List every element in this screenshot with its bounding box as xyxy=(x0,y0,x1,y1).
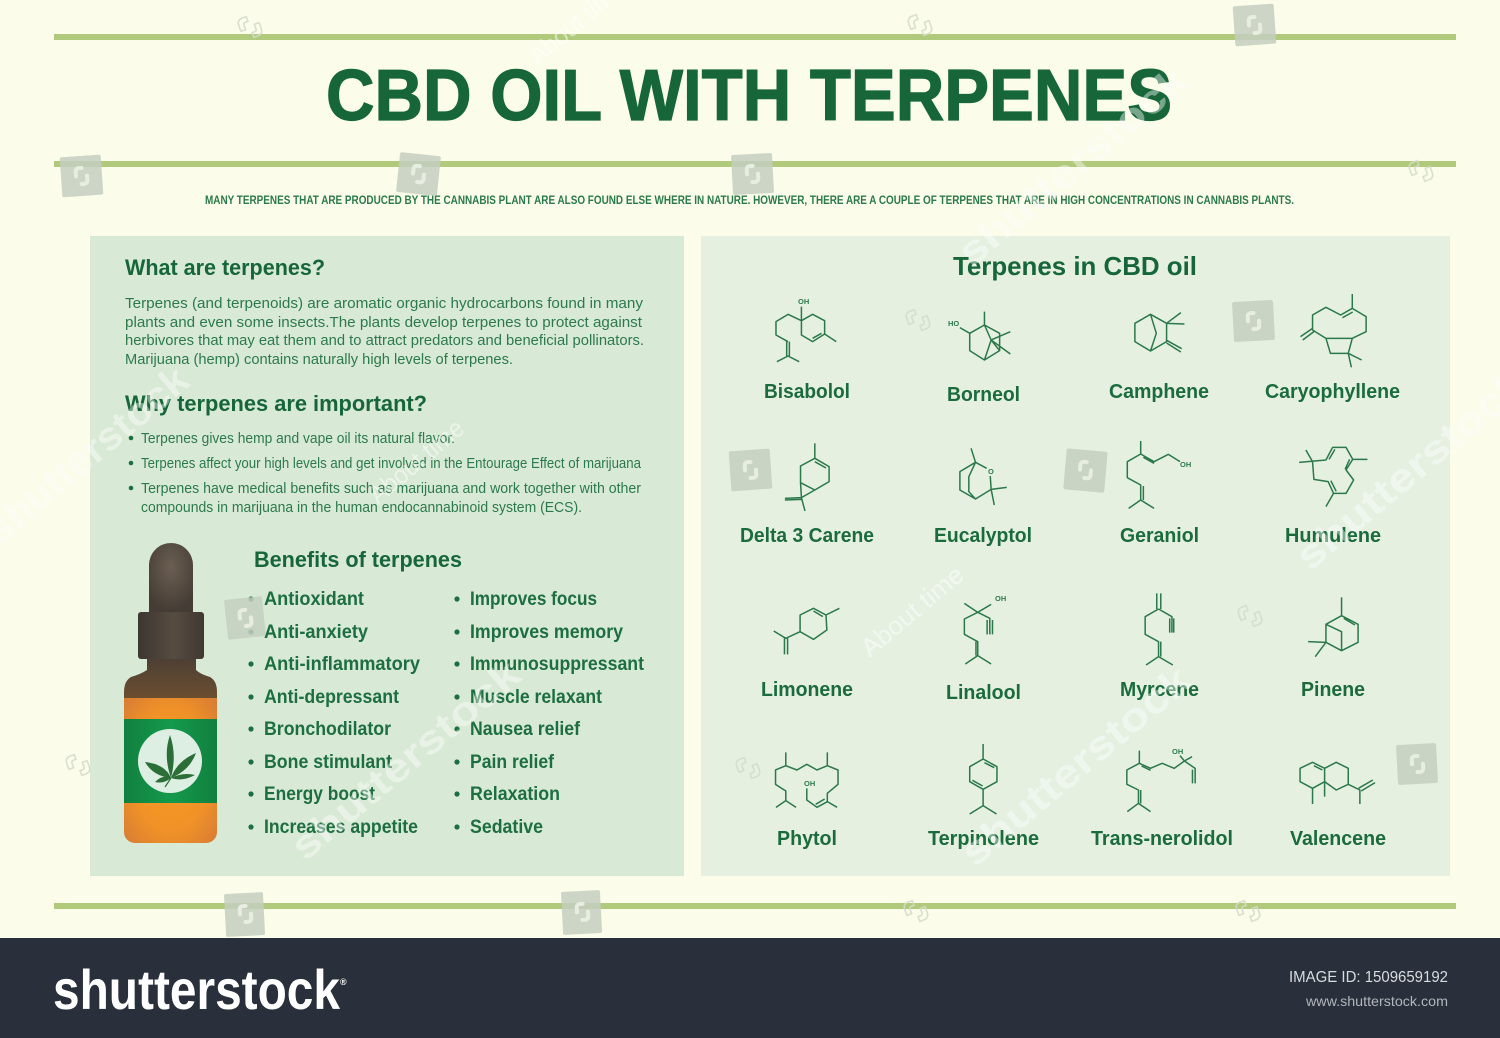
watermark: stock overlay: About time xyxy=(363,413,470,510)
footer bar xyxy=(0,938,1500,1038)
watermark: stock overlay: shutterstock xyxy=(283,651,530,869)
label: Caryophyllene: Caryophyllene xyxy=(1265,381,1400,403)
molecule: Bisabolol xyxy=(776,297,836,362)
watermark: stock overlay: shutterstock xyxy=(953,657,1200,875)
molecule: Linalool xyxy=(964,594,1006,664)
title: CBD OIL WITH TERPENES xyxy=(326,56,1172,136)
molecule: Humulene xyxy=(1299,447,1367,507)
bullet list: importance xyxy=(129,430,642,516)
label: Geraniol: Geraniol xyxy=(1120,525,1199,547)
molecule: Geraniol: OH xyxy=(1180,460,1191,469)
list: benefits column two: Nausea relief xyxy=(470,719,581,740)
list: benefits column two xyxy=(454,589,645,838)
watermark: stock overlay: About time xyxy=(855,559,970,663)
watermark: stock overlay: shutterstock xyxy=(1288,361,1500,579)
list: benefits column one: Antioxidant xyxy=(264,589,365,610)
molecule: Terpinolene xyxy=(970,744,997,814)
icon: cannabis leaf xyxy=(145,735,196,787)
list: benefits column one xyxy=(248,589,420,838)
molecule: Trans-nerolidol: OH xyxy=(1172,747,1183,756)
title lower rule xyxy=(54,161,1456,167)
footer image id: IMAGE ID: 1509659192 xyxy=(1289,969,1448,986)
panel: what are terpenes and benefits xyxy=(90,236,684,876)
label: Eucalyptol: Eucalyptol xyxy=(934,525,1032,547)
molecule: Trans-nerolidol xyxy=(1127,747,1195,812)
icon: CBD oil dropper bottle xyxy=(124,543,217,843)
label: Delta 3 Carene: Delta 3 Carene xyxy=(740,525,874,547)
bullet list: importance: Terpenes gives hemp and vape oil its natural flavor. xyxy=(141,430,455,447)
label: Borneol: Borneol xyxy=(947,384,1020,406)
molecule: Borneol xyxy=(948,312,1010,360)
label: Phytol: Phytol xyxy=(777,828,837,850)
molecule: Pinene xyxy=(1308,597,1358,657)
molecule: Camphene xyxy=(1135,313,1184,352)
molecule: Myrcene xyxy=(1145,593,1174,665)
label: Terpinolene: Terpinolene xyxy=(928,828,1039,850)
label: Humulene: Humulene xyxy=(1285,525,1381,547)
label: Camphene: Camphene xyxy=(1109,381,1209,403)
list: benefits column one: Energy boost xyxy=(264,784,376,805)
bullet list: importance: Terpenes have medical benefits such as marijuana and work together with other xyxy=(141,480,641,497)
footer website: www.shutterstock.com xyxy=(1305,993,1448,1009)
label: Pinene: Pinene xyxy=(1301,679,1365,701)
molecule: Geraniol xyxy=(1127,441,1191,508)
label: Limonene: Limonene xyxy=(761,679,853,701)
list: benefits column one: Anti-anxiety xyxy=(264,622,368,643)
label: Trans-nerolidol: Trans-nerolidol xyxy=(1091,828,1233,850)
molecule: Linalool: OH xyxy=(995,594,1006,603)
label: Linalool: Linalool xyxy=(946,682,1021,704)
molecule: Limonene xyxy=(774,608,839,654)
footer registered mark: ® xyxy=(340,977,347,987)
list: benefits column one: Bone stimulant xyxy=(264,752,393,773)
molecule: Borneol: HO xyxy=(948,319,959,328)
list: benefits column two: Improves memory xyxy=(470,622,623,643)
heading: why terpenes are important: Why terpenes are important? xyxy=(125,391,427,416)
label: Myrcene: Myrcene xyxy=(1120,679,1199,701)
molecule: Eucalyptol: O xyxy=(988,467,994,476)
list: benefits column two: Sedative xyxy=(470,817,543,838)
list: benefits column two: Relaxation xyxy=(470,784,560,805)
list: benefits column two: Immunosuppressant xyxy=(470,654,645,675)
text block: terpene definition: Terpenes (and terpenoids) are aromatic organic hydrocarbons found in many xyxy=(125,295,644,312)
footer logo: shutterstock xyxy=(53,958,341,1021)
molecule: Eucalyptol xyxy=(960,448,1007,505)
text block: terpene definition xyxy=(125,295,644,368)
list: benefits column two: Improves focus xyxy=(470,589,597,610)
text block: terpene definition: Marijuana (hemp) contains naturally high levels of terpenes. xyxy=(125,351,513,368)
list: benefits column one: Bronchodilator xyxy=(264,719,392,740)
list: benefits column one: Anti-inflammatory xyxy=(264,654,420,675)
text block: terpene definition: plants and even some insects.The plants develop terpenes to protect against xyxy=(125,314,643,331)
subtitle: MANY TERPENES THAT ARE PRODUCED BY THE CANNABIS PLANT ARE ALSO FOUND ELSE WHERE IN NATURE. HOWEVER, THERE ARE A COUPLE OF TERPENES THAT ARE IN HIGH CONCENTRATIONS IN CANNABIS PLANTS. xyxy=(205,193,1294,207)
molecule: Bisabolol: OH xyxy=(798,297,809,306)
watermark: stock overlay: shutterstock xyxy=(950,57,1197,275)
list: benefits column two: Muscle relaxant xyxy=(470,687,603,708)
text block: terpene definition: herbivores that may eat them and to attract predators and beneficial pollinators. xyxy=(125,332,644,349)
molecule: Phytol: OH xyxy=(804,779,815,788)
label: Bisabolol: Bisabolol xyxy=(764,381,850,403)
panel: terpenes in CBD oil xyxy=(701,236,1450,876)
bullet list: importance: Terpenes affect your high levels and get involved in the Entourage Effect of marijuana xyxy=(141,455,642,472)
label: Valencene: Valencene xyxy=(1290,828,1386,850)
molecule: Delta 3 Carene xyxy=(785,443,829,511)
molecule: Valencene xyxy=(1300,762,1375,804)
list: benefits column one: Increases appetite xyxy=(264,817,418,838)
list: benefits column two: Pain relief xyxy=(470,752,555,773)
heading: what are terpenes: What are terpenes? xyxy=(125,255,325,280)
molecule: Caryophyllene xyxy=(1300,294,1366,367)
molecule: Phytol xyxy=(776,752,838,807)
list: benefits column one: Anti-depressant xyxy=(264,687,400,708)
heading: terpenes in CBD oil: Terpenes in CBD oil xyxy=(953,251,1197,281)
bullet list: importance: compounds in marijuana in the human endocannabinoid system (ECS). xyxy=(141,499,582,516)
heading: benefits of terpenes: Benefits of terpenes xyxy=(254,547,462,572)
top divider rule xyxy=(54,34,1456,40)
bottom divider rule xyxy=(54,903,1456,909)
